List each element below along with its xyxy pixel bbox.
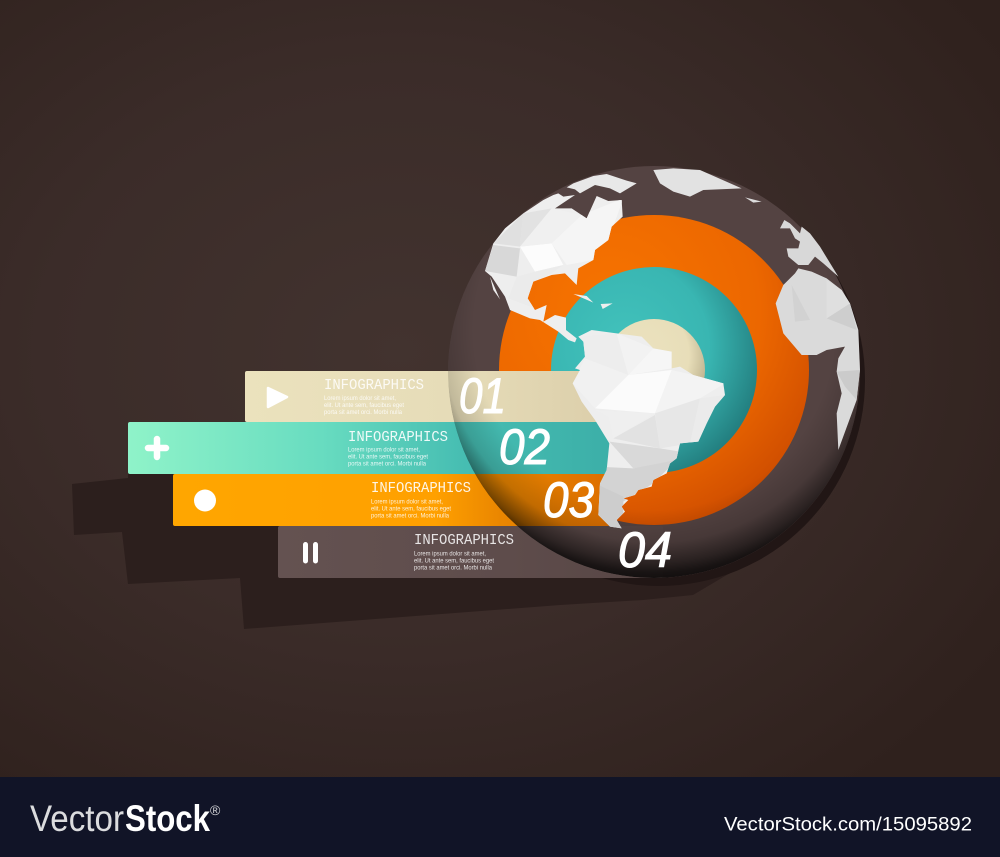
ribbon 04 text: Lorem ipsum dolor sit amet, <box>414 550 486 558</box>
globe cast shadow <box>453 174 865 586</box>
land base americas <box>485 194 725 528</box>
continents <box>480 168 867 533</box>
icon: plus <box>148 439 166 457</box>
footer logo: Vector <box>30 798 124 839</box>
north america facets <box>485 198 623 308</box>
footer bar <box>0 777 1000 857</box>
ribbon 03 text <box>371 498 451 520</box>
number 03: 03 <box>543 472 594 528</box>
polygon land masses <box>480 190 867 533</box>
ribbon 02 text: elit. Ut ante sem, faucibus eget <box>348 454 428 460</box>
ribbon 01 text <box>324 395 404 416</box>
africa facets <box>827 288 860 400</box>
ribbon 03 <box>173 474 610 526</box>
number 01: 01 <box>459 368 506 424</box>
icon: play <box>268 388 287 407</box>
ribbon 02 text: Lorem ipsum dolor sit amet, <box>348 446 420 454</box>
ribbon 04 text: elit. Ut ante sem, faucibus eget <box>414 558 494 564</box>
ribbon drop shadow <box>72 470 800 629</box>
south america facets <box>573 333 725 533</box>
land base africa <box>776 268 860 450</box>
iceland <box>745 197 762 203</box>
globe sphere <box>448 166 860 578</box>
ribbon 01 text: Lorem ipsum dolor sit amet, <box>324 395 396 402</box>
globe rim shading <box>448 328 860 578</box>
globe <box>448 166 865 586</box>
ribbon 03 text: porta sit amet orci. Morbi nulla <box>371 512 449 520</box>
footer logo <box>30 798 221 839</box>
ribbon 04 text <box>414 550 494 572</box>
ribbon 01 <box>245 371 600 422</box>
ribbon 04 heading: INFOGRAPHICS <box>414 532 514 549</box>
ribbon 01 text: porta sit amet orci. Morbi nulla <box>324 409 402 416</box>
inner beige ring <box>603 319 705 421</box>
ribbon 01 text: elit. Ut ante sem, faucibus eget <box>324 402 404 409</box>
footer logo: Stock <box>125 798 210 839</box>
ribbon 02 heading: INFOGRAPHICS <box>348 429 448 446</box>
ribbon 03 text: elit. Ut ante sem, faucibus eget <box>371 506 451 512</box>
ribbon 01 heading: INFOGRAPHICS <box>324 377 424 394</box>
footer image id: VectorStock.com/15095892 <box>724 814 972 836</box>
outer orange ring <box>499 215 809 525</box>
greenland <box>653 168 742 197</box>
ribbon 02 text: porta sit amet orci. Morbi nulla <box>348 460 426 468</box>
europe <box>780 220 838 277</box>
footer logo: ® <box>210 802 221 818</box>
icon: pause <box>306 544 316 561</box>
icon: circle <box>194 490 216 512</box>
ribbon 03 heading: INFOGRAPHICS <box>371 480 471 497</box>
caribbean islands <box>573 294 613 309</box>
ribbon 02 text <box>348 446 428 468</box>
ribbon 04 <box>278 526 663 578</box>
ribbon 03 text: Lorem ipsum dolor sit amet, <box>371 498 443 506</box>
ribbon 04 text: porta sit amet orci. Morbi nulla <box>414 564 492 572</box>
middle teal ring <box>551 267 757 473</box>
number 04: 04 <box>618 522 672 578</box>
number 02: 02 <box>499 419 550 475</box>
arctic islands <box>567 174 637 193</box>
ribbon 02 <box>128 422 610 474</box>
